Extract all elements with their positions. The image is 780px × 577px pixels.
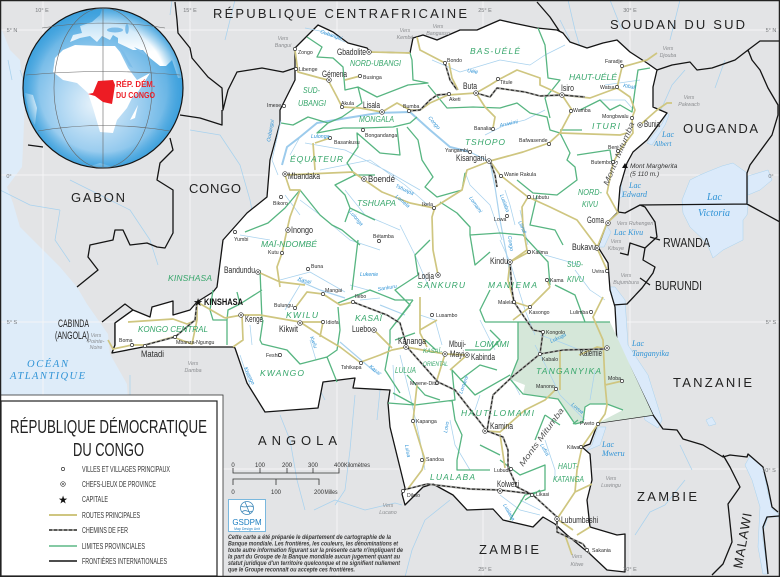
graticule labels: 25° E — [478, 8, 492, 14]
city labels: Bongandanga — [365, 133, 397, 139]
city labels: Lulimba — [570, 310, 588, 316]
legend: capitale — [58, 494, 108, 506]
province labels: LUALABA — [430, 472, 475, 482]
"Vers" road destination labels: Vers — [606, 476, 617, 482]
"Vers" road destination labels: Vers — [278, 36, 289, 42]
river and lake labels: Kasaï — [368, 364, 382, 377]
lakes outside and along the frontier — [586, 113, 779, 574]
city labels: Sakania — [592, 548, 611, 554]
"Vers" road destination labels: Damba — [184, 368, 202, 374]
river and lake labels: Lac Kivu — [613, 228, 643, 237]
legend: frontières internationales — [49, 557, 167, 566]
ocean label: ATLANTIQUE — [9, 371, 86, 382]
province labels: ITURI — [592, 121, 621, 131]
province labels: SUD- — [303, 85, 320, 95]
city labels: Bafwasende — [519, 138, 548, 144]
legend: capitale: ★ — [58, 494, 68, 506]
river and lake labels: Lac — [631, 339, 644, 348]
limites provinciales — [210, 28, 650, 520]
city labels: Isiro — [561, 83, 574, 93]
legend: routes: ROUTES PRINCIPALES — [82, 511, 140, 520]
river and lake labels: Lac — [661, 130, 674, 139]
city labels: Luebo — [352, 324, 371, 334]
river and lake labels: Tanganyika — [632, 349, 669, 358]
river and lake labels: Kwango — [242, 366, 256, 386]
city labels: Lisala — [363, 100, 380, 110]
scale bars: 200 — [282, 463, 293, 469]
globe: graticule — [26, 8, 180, 168]
disclaimer: que le Groupe reconnaît ou accepte ces frontières. — [228, 568, 355, 574]
scale bars: 0 — [231, 463, 235, 469]
peak label: Mont Margherita: (5 110 m.) — [630, 171, 659, 178]
"Vers" road destination labels: Kibuye — [608, 246, 624, 252]
scale bars: Milles — [324, 490, 338, 496]
city labels: Mayi — [450, 349, 464, 359]
"Vers" road destination labels — [88, 24, 700, 568]
city labels: Zongo — [298, 50, 313, 56]
river and lake labels: Edward — [621, 190, 648, 199]
province labels: KASAÏ — [355, 313, 384, 323]
"Vers" road destination labels: Luwingu — [601, 483, 621, 489]
city labels: Akula — [341, 101, 354, 107]
province labels: NORD- — [578, 187, 602, 197]
"Vers" road destination labels: Noire — [90, 345, 102, 351]
city labels: Bulungu — [274, 303, 293, 309]
scale bars: 400 — [334, 463, 345, 469]
city labels: Wanie Rakula — [504, 172, 536, 178]
"Vers" road destination labels: Pointe- — [88, 339, 105, 345]
river and lake labels: Kibali — [623, 83, 637, 91]
city labels: Bondo — [447, 58, 462, 64]
city labels: Tshikapa — [341, 365, 362, 371]
mountain range labels — [517, 120, 637, 468]
river and lake labels: Ulindi — [516, 220, 527, 235]
legend title: DU CONGO — [73, 439, 144, 460]
province labels: NORD-UBANGI — [350, 58, 402, 68]
"Vers" road destination labels: Pakwach — [678, 102, 700, 108]
scale bars: 300 — [308, 463, 319, 469]
river and lake labels: Luvua — [570, 402, 584, 416]
city labels: Beni — [608, 145, 618, 151]
country label: République centrafricaine: RÉPUBLIQUE CENTRAFRICAINE — [213, 6, 467, 21]
city labels: Uvira — [592, 269, 604, 275]
graticule labels: 30° E — [623, 8, 637, 14]
scale bars: Kilomètres — [344, 463, 370, 469]
disclaimer: Cette carte a été préparée le département de cartographie de la — [228, 535, 392, 541]
province labels: ORIENTAL — [423, 361, 448, 368]
panel: legend — [0, 395, 223, 577]
river and lake labels: Lukuga — [549, 332, 567, 345]
country label: Zambie east: ZAMBIE — [637, 489, 697, 504]
river and lake labels: Sankuru — [377, 284, 397, 293]
legend title: RÉPUBLIQUE DÉMOCRATIQUE — [10, 416, 207, 437]
city labels: Mbandaka — [288, 171, 320, 181]
city labels: Mbanza-Ngungu — [176, 340, 214, 346]
legend: routes — [49, 511, 140, 520]
city labels: Buta — [463, 81, 477, 91]
river and lake labels: Oubangui — [266, 118, 276, 142]
city labels: Kamina — [490, 421, 513, 431]
city labels: Kongolo — [546, 330, 565, 336]
river and lake labels: Uélé — [467, 68, 478, 76]
city labels: Kutu — [268, 250, 279, 256]
province labels: HAUT-UÉLÉ — [569, 72, 617, 82]
province labels: SANKURU — [417, 280, 466, 290]
city labels: Kenge — [245, 314, 263, 324]
scale bars: 100 — [255, 463, 266, 469]
country label: Gabon: GABON — [71, 190, 125, 205]
city labels: Kalima — [532, 250, 548, 256]
legend: villes et villages — [61, 465, 170, 474]
river and lake labels: Lulonga — [311, 134, 330, 140]
river and lake labels: Albert — [653, 140, 673, 148]
province labels: BAS-UÉLÉ — [470, 46, 520, 56]
city labels: Kama — [550, 278, 564, 284]
province labels: KWANGO — [260, 368, 304, 378]
river and lake labels: Kasaï — [297, 276, 312, 286]
country label: Burundi: BURUNDI — [655, 278, 702, 293]
city labels: Watsa — [600, 85, 615, 91]
city labels — [119, 47, 660, 554]
"Vers" road destination labels: Vers — [621, 273, 632, 279]
city labels: Boendé — [368, 174, 395, 184]
mountain range labels: Monts Mitumba — [517, 406, 566, 468]
legend: villes et villages: VILLES ET VILLAGES PRINCIPAUX — [82, 465, 170, 474]
globe: DRC label — [116, 80, 155, 100]
province labels: KIVU — [582, 199, 599, 209]
city labels: Kabalo — [542, 357, 558, 363]
province labels: KATANGA — [553, 474, 584, 484]
"Vers" road destination labels: Kitwe — [571, 562, 584, 568]
city labels: Kolwezi — [497, 479, 519, 489]
city labels: Kisangani — [456, 153, 486, 163]
disclaimer — [228, 535, 404, 574]
GSDPM logo: Map Design Unit — [234, 527, 260, 531]
province labels: ÉQUATEUR — [290, 154, 343, 164]
graticule labels: 0° — [6, 174, 12, 180]
mountain peak: Mont Margherita — [622, 163, 628, 168]
river and lake labels: Lualaba — [501, 503, 516, 522]
city labels: KINSHASA — [204, 297, 243, 307]
city labels: Mongbwalu — [602, 114, 629, 120]
province labels: KASAÏ- — [423, 347, 443, 355]
ocean — [0, 25, 128, 400]
globe: DRC label: DU CONGO — [116, 91, 155, 100]
city labels: Lusambo — [436, 313, 457, 319]
"Vers" road destination labels: Vers — [188, 361, 199, 367]
city labels: Imese — [267, 103, 281, 109]
river and lake labels: Lomami — [458, 374, 470, 395]
river and lake labels: Tshuapa — [394, 183, 415, 197]
city labels: Lubutu — [533, 195, 549, 201]
province labels — [138, 46, 621, 484]
river and lake labels: Lulua — [403, 444, 411, 458]
panel: DRC territory — [112, 20, 667, 572]
river and lake labels: Lac — [706, 192, 723, 203]
city labels: Bandundu — [224, 265, 255, 275]
disclaimer: toute autre information figurant sur la présente carte n'impliquent de — [228, 548, 404, 554]
cities: province capitals and towns — [130, 47, 642, 552]
legend: frontières internationales: FRONTIÈRES INTERNATIONALES — [82, 557, 167, 566]
"Vers" road destination labels: Vers — [400, 28, 411, 34]
river and lake labels: Congo — [426, 115, 441, 131]
province labels: LOMAMI — [475, 339, 510, 349]
city labels: Titule — [500, 80, 513, 86]
city labels: Kapanga — [416, 419, 437, 425]
graticule labels: 0° — [768, 174, 774, 180]
country label: Congo: CONGO — [189, 181, 241, 196]
river and lake labels: Lac — [601, 440, 614, 449]
peak label: Mont Margherita: Mont Margherita — [630, 163, 678, 170]
city labels: Lubumbashi — [561, 515, 598, 525]
"Vers" road destination labels: Lucano — [379, 510, 397, 516]
ocean label: OCÉAN — [27, 358, 69, 370]
graticule labels: 15° E — [183, 8, 197, 14]
city labels: Kikwit — [279, 324, 298, 334]
city labels: Matadi — [141, 349, 164, 359]
country label: Tanzanie: TANZANIE — [673, 375, 752, 390]
peak label: Mont Margherita — [630, 163, 678, 178]
city labels: Aketi — [449, 97, 461, 103]
river and lake labels: Lukenie — [360, 272, 378, 278]
graticule labels: 10° E — [35, 8, 49, 14]
legend: chemins de fer: CHEMINS DE FER — [82, 526, 128, 535]
city labels: Kananga — [398, 336, 426, 346]
legend: chemins de fer — [49, 526, 128, 535]
"Vers" road destination labels: Kembé — [397, 35, 413, 41]
province labels: KINSHASA — [168, 273, 212, 283]
GSDPM logo — [228, 500, 266, 532]
river and lake labels: Lufira — [538, 443, 550, 457]
country label: Cabinda (Angola) — [55, 318, 89, 342]
country label: Malawi: MALAWI — [730, 512, 755, 570]
scale bars: 100 — [271, 490, 282, 496]
province labels: MONGALA — [359, 114, 394, 124]
city labels: Ikela — [422, 202, 433, 208]
city labels: Lodja — [418, 271, 434, 281]
city labels: Gémena — [322, 69, 347, 79]
"Vers" road destination labels: Vers — [433, 24, 444, 30]
legend: limites provinciales: LIMITES PROVINCIALES — [82, 542, 145, 551]
city labels: Basankusu — [334, 140, 360, 146]
legend: chefs-lieux: CHEFS-LIEUX DE PROVINCE — [82, 480, 156, 489]
province labels: KIVU — [567, 274, 585, 284]
city labels: Inongo — [291, 225, 313, 235]
province labels: HAUT-LOMAMI — [461, 408, 535, 418]
city labels: Buna — [311, 264, 323, 270]
panel: Tanganyika province highlight — [510, 322, 653, 424]
"Vers" road destination labels: Vers Ruhengeri — [617, 221, 654, 227]
province labels: KWILU — [286, 310, 319, 320]
graticule labels: 10° S — [762, 468, 776, 474]
province labels: SUD- — [567, 259, 583, 269]
river and lake labels: Aruwimi — [498, 119, 519, 129]
legend: capitale: CAPITALE — [82, 495, 108, 504]
scale bars — [231, 463, 370, 496]
capital star: Kinshasa: ★ — [193, 296, 203, 309]
city labels: Sandoa — [426, 457, 444, 463]
country label: Ouganda: OUGANDA — [683, 121, 758, 136]
ocean label — [9, 358, 86, 382]
country label: Rwanda: RWANDA — [663, 235, 710, 250]
river and lake labels: Lovo — [443, 421, 451, 433]
graticule labels: 5° S — [766, 320, 777, 326]
province labels: MANIEMA — [488, 280, 537, 290]
country label: Zambie south: ZAMBIE — [479, 542, 539, 557]
river and lake labels: Lac — [628, 181, 641, 190]
city labels: Goma — [587, 215, 604, 225]
province labels: MAÏ-NDOMBÉ — [261, 239, 317, 249]
city labels: Bunia — [644, 119, 660, 129]
globe: inland seas — [107, 24, 146, 68]
river and lake labels: Mweru — [601, 449, 625, 458]
disclaimer: Banque mondiale. Les frontières, les couleurs, les dénominations et — [228, 542, 399, 548]
graticule labels: 5° N — [7, 28, 17, 34]
city labels: Malela — [498, 300, 513, 306]
city labels: Butembo — [591, 160, 612, 166]
routes principales — [108, 37, 672, 555]
"Vers" road destination labels: Vers — [91, 333, 102, 339]
city labels: Banalia — [474, 126, 491, 132]
country label: Cabinda (Angola): CABINDA — [58, 318, 89, 330]
city labels: Feshi — [266, 353, 279, 359]
river and lake labels: Victoria — [698, 208, 730, 219]
province labels: HAUT- — [558, 461, 578, 471]
province labels: UBANGI — [298, 98, 327, 108]
city labels: Ilebo — [355, 294, 366, 300]
city labels: Mwene-Ditu — [410, 381, 438, 387]
river and lake labels: Lulonga — [347, 209, 364, 228]
city labels: Pweto — [580, 421, 595, 427]
province labels: KONGO CENTRAL — [138, 324, 208, 334]
city labels: Libenge — [299, 67, 318, 73]
"Vers" road destination labels: Vers — [611, 239, 622, 245]
globe: land — [25, 8, 182, 168]
DRC rivers — [240, 20, 640, 515]
graticule labels: 5° N — [766, 28, 776, 34]
GSDPM logo: GSDPM — [232, 518, 262, 527]
city labels: Businga — [363, 75, 382, 81]
city labels: Bikoro — [273, 201, 288, 207]
city labels: Yumbi — [234, 237, 248, 243]
city labels: Moba — [608, 376, 621, 382]
scale bars: 200 — [314, 490, 325, 496]
city labels: Mbuji- — [449, 339, 466, 349]
globe: DRC label: RÉP. DÉM. — [116, 80, 155, 89]
legend: limites provinciales — [49, 542, 145, 551]
"Vers" road destination labels: Vers — [383, 503, 394, 509]
city labels: Dilolo — [407, 493, 420, 499]
river and lake labels: Lomami — [467, 196, 483, 215]
globe: DRC in red — [88, 80, 115, 104]
river and lake labels: Lomela — [394, 194, 411, 210]
country label: Soudan du Sud: SOUDAN DU SUD — [610, 17, 745, 32]
city labels: Yangambi — [445, 148, 468, 154]
city labels: Lowa — [494, 217, 507, 223]
legend: chefs-lieux — [61, 480, 156, 489]
country label: Angola: ANGOLA — [258, 433, 337, 448]
river and lake labels: Lualaba — [498, 194, 510, 213]
city labels: Bumba — [403, 104, 420, 110]
graticule labels: 25° E — [478, 567, 492, 573]
city labels: Manono — [536, 384, 555, 390]
"Vers" road destination labels: Bangui — [275, 43, 292, 49]
city labels: Kindu — [490, 256, 508, 266]
"Vers" road destination labels: Bangasso — [426, 31, 450, 37]
"Vers" road destination labels: Vers — [684, 95, 695, 101]
city labels: Kilwa — [567, 445, 580, 451]
"Vers" road destination labels: Vers — [572, 554, 583, 560]
legend title — [10, 416, 207, 460]
locator globe — [22, 7, 184, 169]
city labels: Boma — [119, 338, 133, 344]
city labels: Bétamba — [373, 234, 394, 240]
country label: Cabinda (Angola): (ANGOLA) — [55, 330, 89, 342]
city labels: Mangai — [325, 288, 342, 294]
river and lake labels: Oubangui — [319, 29, 343, 42]
city labels: Kalémie — [580, 348, 602, 358]
river and lake labels: Kwilu — [308, 336, 318, 349]
city labels: Bukavu — [572, 242, 596, 252]
river and lake labels: Congo — [506, 235, 514, 252]
city labels: Gbadolite — [337, 47, 366, 57]
city labels: Kabinda — [471, 352, 495, 362]
graticule labels: 5° S — [7, 320, 18, 326]
city labels: Lubudi — [494, 468, 510, 474]
scale bars: 0 — [231, 490, 235, 496]
globe: limb shading — [23, 8, 183, 168]
city labels: Likasi — [536, 492, 549, 498]
disclaimer: la part du Groupe de la Banque mondiale aucun jugement quant au — [228, 554, 400, 560]
"Vers" road destination labels: Vers — [663, 46, 674, 52]
graticule labels: 30° E — [623, 567, 637, 573]
mountain range labels: Monts Mitumba — [602, 120, 637, 187]
province labels: TSHUAPA — [357, 198, 396, 208]
disclaimer: statut juridique d'un territoire quelconque et ne signifient nullement — [228, 561, 401, 567]
city labels: Wamba — [573, 108, 591, 114]
province labels: TANGANYIKA — [536, 366, 601, 376]
city labels: Idiofa — [326, 320, 339, 326]
chemins de fer — [145, 63, 607, 554]
city labels: Faradje — [605, 59, 623, 65]
"Vers" road destination labels: Bujumbura — [613, 280, 639, 286]
logo globe mark — [240, 502, 254, 514]
city labels: Kasongo — [529, 310, 550, 316]
river and lake labels — [242, 29, 730, 522]
province labels: TSHOPO — [465, 137, 505, 147]
province labels: LULUA — [395, 365, 416, 375]
"Vers" road destination labels: Djouba — [660, 53, 676, 59]
